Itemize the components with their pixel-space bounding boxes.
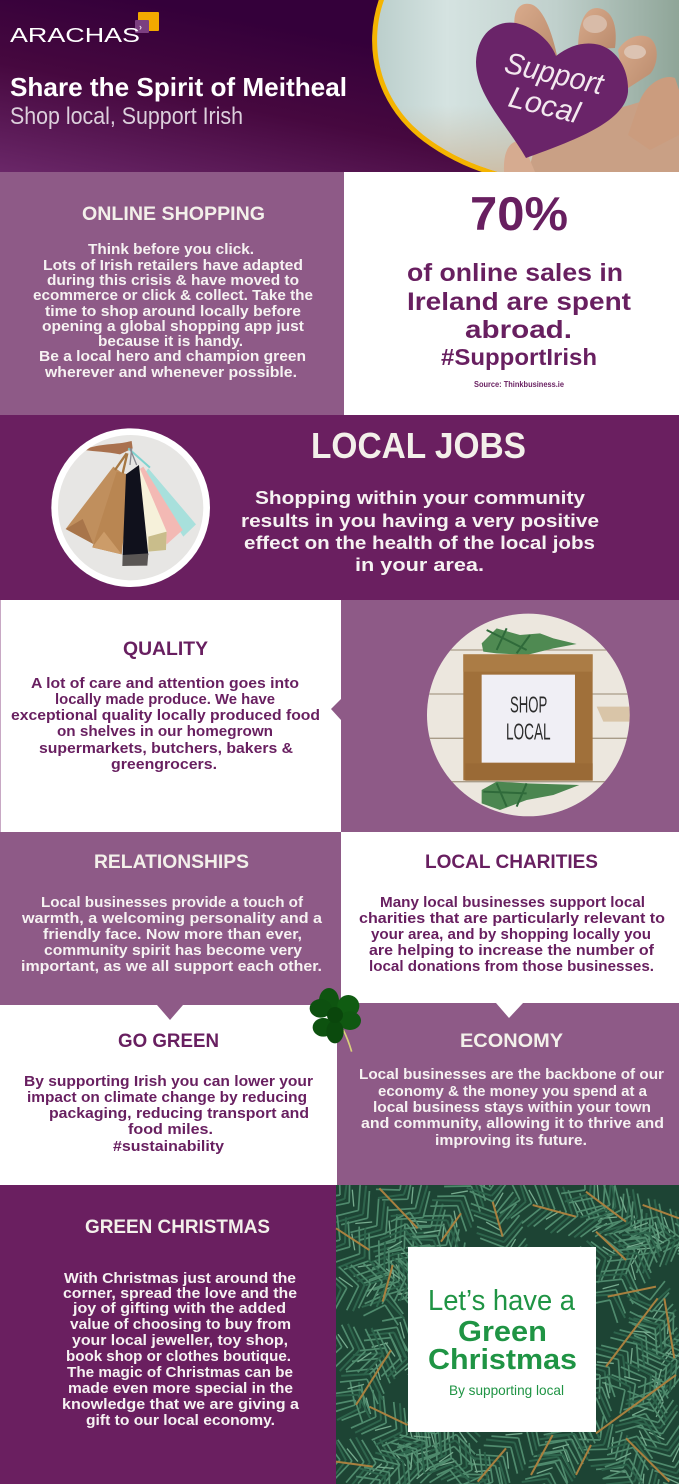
body text: on shelves in our homegrown (57, 724, 273, 740)
body text (11, 676, 320, 773)
body text: because it is handy. (98, 334, 243, 350)
logo: Arachas: ARACHAS (10, 25, 140, 47)
panel: quality (0, 600, 341, 832)
heading: RELATIONSHIPS (94, 852, 249, 873)
panel: online shopping (0, 172, 344, 415)
card: Green (458, 1316, 547, 1348)
body text: during this crisis & have moved to (47, 273, 299, 289)
body text: With Christmas just around the (64, 1271, 296, 1287)
heading: QUALITY (123, 639, 208, 660)
body text: ecommerce or click & collect. Take the (33, 288, 313, 304)
palm and fingers (531, 102, 679, 172)
body text: results in you having a very positive (241, 511, 599, 531)
body text: packaging, reducing transport and (49, 1106, 309, 1122)
panel: local jobs (0, 415, 679, 600)
statistic text: Ireland are spent (407, 288, 632, 316)
body text (21, 895, 323, 975)
source: Source: Thinkbusiness.ie (474, 380, 565, 389)
body text: charities that are particularly relevant to (359, 911, 665, 927)
body text: By supporting Irish you can lower your (24, 1074, 313, 1090)
body text: greengrocers. (111, 757, 217, 773)
body text: #sustainability (113, 1139, 224, 1155)
body text: food miles. (128, 1122, 213, 1138)
body text: Many local businesses support local (380, 895, 645, 911)
body text: value of choosing to buy from (70, 1317, 291, 1333)
photo: shopping bags (51, 428, 210, 587)
body text: friendly face. Now more than ever, (43, 927, 302, 943)
body text: knowledge that we are giving a (62, 1397, 300, 1413)
body text: your area, and by shopping locally you (371, 927, 651, 943)
body text: opening a global shopping app just (42, 319, 304, 335)
card: Christmas (428, 1344, 577, 1376)
statistic text: of online sales in (407, 259, 623, 287)
body text: The magic of Christmas can be (67, 1365, 293, 1381)
photo: fir branches with green christmas card (336, 1185, 679, 1484)
photo: framed shop local sign: SHOP (510, 692, 547, 718)
statistic text (407, 259, 632, 344)
body text: your local jeweller, toy shop, (72, 1333, 288, 1349)
card: Let’s have a (428, 1285, 576, 1317)
panel: green christmas (0, 1185, 336, 1484)
body text: wherever and whenever possible. (44, 365, 297, 381)
hashtag: #SupportIrish (441, 344, 597, 370)
body text (359, 1067, 664, 1149)
logo: Arachas: › (139, 22, 142, 32)
body text: Local businesses are the backbone of our (359, 1067, 664, 1083)
body text: Shopping within your community (255, 488, 585, 508)
body text (33, 242, 313, 381)
body text: book shop or clothes boutique. (66, 1349, 291, 1365)
heading: GREEN CHRISTMAS (85, 1217, 270, 1238)
body text: supermarkets, butchers, bakers & (39, 741, 294, 757)
body text: economy & the money you spend at a (378, 1084, 648, 1100)
body text: Lots of Irish retailers have adapted (43, 258, 303, 274)
photo: framed shop local sign (427, 614, 630, 816)
heading: LOCAL JOBS (311, 425, 526, 466)
logo: Arachas (10, 12, 159, 47)
body text: Be a local hero and champion green (39, 349, 306, 365)
body text (241, 488, 599, 575)
body text: Think before you click. (88, 242, 254, 258)
photo: hand holding heart (370, 0, 679, 172)
card: By supporting local (449, 1382, 564, 1398)
body text: important, as we all support each other. (21, 959, 322, 975)
panel: economy (337, 1003, 679, 1185)
photo: hand holding heart: Local (505, 81, 584, 131)
photo: framed shop local sign: LOCAL (506, 718, 551, 744)
body text: made even more special in the (68, 1381, 293, 1397)
body text: corner, spread the love and the (63, 1286, 297, 1302)
body text: time to shop around locally before (45, 304, 301, 320)
panel: go green (0, 1005, 337, 1185)
heading: LOCAL CHARITIES (425, 852, 598, 873)
panel: shop local photo (331, 600, 679, 832)
card (408, 1247, 596, 1432)
body text: local business stays within your town (373, 1100, 651, 1116)
body text: Local businesses provide a touch of (41, 895, 303, 911)
panel: local charities (341, 832, 679, 1004)
heart (476, 23, 628, 158)
heading: GO GREEN (118, 1031, 219, 1052)
photo: hand holding heart: Support (501, 47, 608, 102)
icon: four-leaf clover (310, 988, 361, 1052)
fir twigs (336, 1188, 679, 1482)
body text: community spirit has become very (44, 943, 302, 959)
body text: gift to our local economy. (86, 1413, 275, 1429)
body text: joy of gifting with the added (72, 1301, 286, 1317)
body text: local donations from those businesses. (369, 959, 654, 975)
panel: relationships (0, 832, 341, 1005)
body text: in your area. (355, 555, 484, 575)
body text: A lot of care and attention goes into (31, 676, 299, 692)
body text: improving its future. (435, 1133, 587, 1149)
body text: and community, allowing it to thrive and (361, 1116, 664, 1132)
heading: ONLINE SHOPPING (82, 204, 265, 225)
body text: locally made produce. We have (55, 692, 275, 708)
body text (62, 1271, 300, 1429)
body text: effect on the health of the local jobs (244, 533, 595, 553)
body text: are helping to increase the number of (369, 943, 654, 959)
body text (359, 895, 665, 975)
panel: 70% statistic (344, 172, 679, 415)
big number: 70% (470, 187, 568, 240)
heading: ECONOMY (460, 1031, 563, 1052)
body text: impact on climate change by reducing (27, 1090, 307, 1106)
header banner (0, 0, 679, 172)
title: Share the Spirit of Meitheal (10, 72, 347, 102)
body text (24, 1074, 313, 1155)
statistic text: abroad. (465, 316, 572, 344)
body text: exceptional quality locally produced food (11, 708, 320, 724)
subtitle: Shop local, Support Irish (10, 103, 243, 130)
body text: warmth, a welcoming personality and a (21, 911, 323, 927)
